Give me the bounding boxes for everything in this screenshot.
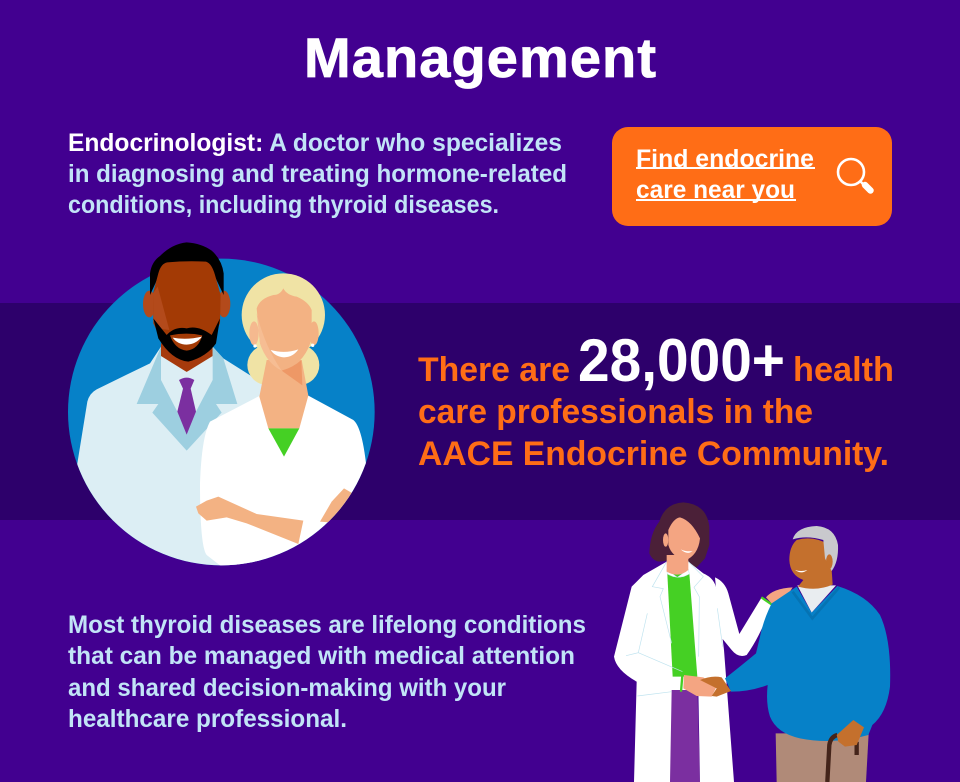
- man ears: [143, 291, 230, 317]
- man tie: [177, 378, 196, 435]
- patient ear: [826, 554, 833, 569]
- doctor green top: [667, 573, 697, 677]
- doctor hair: [649, 502, 709, 567]
- text block: lifelong conditions: Most thyroid diseases are lifelong conditions: [68, 611, 586, 639]
- statistic callout: 28,000+ professionals: AACE Endocrine Community.: [418, 435, 889, 473]
- callout: find endocrine care button: Find endocrine: [636, 145, 814, 173]
- woman crossed arms: [196, 488, 353, 544]
- patient smile: [795, 570, 807, 572]
- callout: find endocrine care button: [612, 127, 892, 226]
- text block: endocrinologist definition: [68, 129, 567, 219]
- doctor smile: [681, 549, 693, 553]
- woman top: [268, 428, 299, 457]
- doctor hand on shoulder: [766, 587, 793, 605]
- text block: endocrinologist definition: Endocrinologist: A doctor who specializes: [68, 129, 562, 157]
- text block: lifelong conditions: [68, 611, 586, 733]
- man face: [153, 261, 221, 357]
- icon: magnifying glass: [838, 159, 870, 190]
- woman coat: [200, 396, 366, 567]
- text block: endocrinologist definition: in diagnosing and treating hormone-related: [68, 160, 567, 188]
- man neck: [161, 343, 213, 372]
- patient trousers: [776, 733, 869, 782]
- text block: lifelong conditions: that can be managed with medical attention: [68, 642, 575, 670]
- text block: endocrinologist definition: conditions, including thyroid diseases.: [68, 191, 499, 219]
- statistic callout: 28,000+ professionals: health: [793, 351, 894, 389]
- man doctor coat: [67, 347, 264, 567]
- patient hand: [837, 720, 864, 747]
- cane: [827, 735, 857, 782]
- woman hair: [242, 273, 325, 385]
- illustration: doctor and older patient: [614, 502, 890, 782]
- patient hair: [793, 526, 838, 571]
- man hair: [150, 242, 224, 295]
- man beard: [153, 318, 220, 362]
- illustration: two doctors in a circle: [67, 242, 375, 567]
- title: Management: [304, 26, 656, 89]
- man shirt collar: [161, 356, 213, 417]
- text block: lifelong conditions: and shared decision-making with your: [68, 674, 506, 702]
- woman face: [257, 288, 312, 372]
- man lapels: [137, 347, 237, 451]
- statistic callout: 28,000+ professionals: There are: [418, 351, 570, 389]
- handshake: [683, 675, 731, 697]
- callout: find endocrine care button: care near you: [636, 176, 795, 204]
- woman neck shadow: [282, 360, 302, 385]
- woman ears and earrings: [249, 321, 319, 348]
- man smile: [173, 337, 202, 345]
- statistic callout: 28,000+ professionals: [418, 327, 894, 473]
- doctor collar: [667, 569, 689, 577]
- patient sweater: [725, 586, 890, 741]
- doctor lapel lines: [626, 562, 723, 696]
- patient head: [789, 538, 833, 589]
- text block: lifelong conditions: healthcare professional.: [68, 705, 347, 733]
- statistic callout: 28,000+ professionals: 28,000+: [578, 327, 785, 394]
- doctor head: [663, 517, 700, 575]
- doctor trousers: [669, 687, 700, 782]
- woman neck: [259, 360, 308, 428]
- patient undershirt: [797, 585, 836, 613]
- doctor cuff: [761, 597, 772, 605]
- woman smile: [271, 349, 298, 357]
- statistic callout: 28,000+ professionals: care professionals in the: [418, 393, 813, 431]
- doctor arm on shoulder: [715, 577, 772, 656]
- doctor coat: [614, 562, 734, 782]
